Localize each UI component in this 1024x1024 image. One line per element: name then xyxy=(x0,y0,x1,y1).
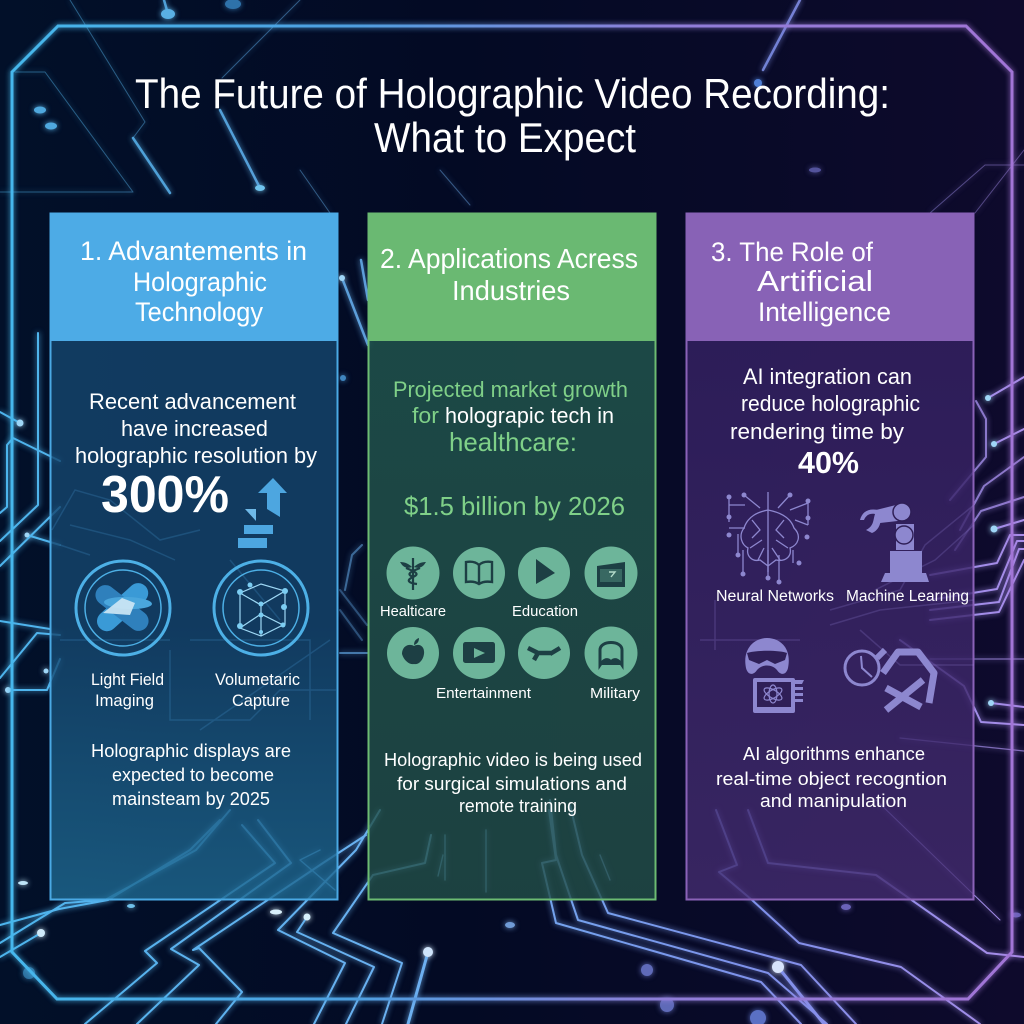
icon: clock and robotic arms xyxy=(845,650,934,710)
panel 1 header: Technology xyxy=(135,297,263,327)
panel 3 intro text: reduce holographic xyxy=(741,391,920,416)
panel 2 intro text xyxy=(393,377,628,457)
panel 2: applications xyxy=(368,213,656,900)
panel 3 intro text: AI integration can xyxy=(743,364,912,389)
panel 2 intro text: healthcare: xyxy=(449,427,577,457)
icon labels xyxy=(91,671,300,710)
panel 2 closing text: remote training xyxy=(459,795,577,816)
panel 1 header: Holographic xyxy=(133,267,267,297)
icon: upward arrow with steps xyxy=(238,478,287,548)
icon labels: Light Field xyxy=(91,671,164,689)
panel 3 closing text: real-time object recogntion xyxy=(716,768,947,789)
panel 1 closing text: Holographic displays are xyxy=(91,740,291,761)
panel 2 closing text: Holographic video is being used xyxy=(384,749,642,770)
icon: drone xyxy=(518,627,570,679)
title: The Future of Holographic Video Recording: xyxy=(135,70,890,117)
panel 2 closing text xyxy=(384,749,642,816)
icon labels: ai: Neural Networks xyxy=(716,588,834,605)
panel 3 body xyxy=(686,214,974,900)
title: What to Expect xyxy=(374,114,636,161)
panel 3 closing text: AI algorithms enhance xyxy=(743,743,925,764)
icon labels: industries: Education xyxy=(512,604,578,620)
panel 3 closing text: and manipulation xyxy=(760,790,907,811)
icon: neural network brain xyxy=(726,492,810,584)
icon: clapperboard xyxy=(584,546,638,600)
icon labels: ai: Machine Learning xyxy=(846,588,969,605)
panel 3 header: 3. The Role of xyxy=(711,237,873,267)
icon labels: industries: Military xyxy=(590,686,641,702)
icon: play xyxy=(518,547,570,599)
icon: robot arm xyxy=(860,503,929,582)
stat: 300%: 300% xyxy=(101,466,229,524)
icon: volumetric capture xyxy=(214,561,308,655)
panel 3 closing text xyxy=(716,743,947,811)
icon labels: industries: Entertainment xyxy=(436,686,531,702)
icon: video screen xyxy=(453,627,505,679)
icon labels: industries xyxy=(380,604,641,702)
panel 1 intro text: holographic resolution by xyxy=(75,443,317,468)
panel 2 header: Industries xyxy=(452,275,570,306)
panel 2 header xyxy=(368,213,656,341)
icon: helmet xyxy=(584,626,638,680)
panel 1 header xyxy=(50,213,338,341)
panel 2 intro text: holograpic tech in xyxy=(445,403,614,428)
panel 3 header: Artificial xyxy=(757,266,873,298)
panel 3 faint circuit detail xyxy=(700,505,974,665)
title xyxy=(135,70,890,161)
stat: 40%: 40% xyxy=(798,445,859,480)
panel 1 closing text xyxy=(91,740,291,809)
icon: light field imaging xyxy=(76,561,170,655)
icon: open book xyxy=(453,547,505,599)
panel 1 closing text: expected to become xyxy=(112,764,274,785)
panel 3 intro text xyxy=(730,364,920,444)
panel 1: advancements xyxy=(50,213,338,900)
panel 3: artificial intelligence xyxy=(686,213,974,900)
panel 3 header: Intelligence xyxy=(758,297,891,327)
icon labels: ai xyxy=(716,588,969,605)
panel 1 intro text: Recent advancement xyxy=(89,389,296,414)
panel 2 header: 2. Applications Acress xyxy=(380,243,638,274)
panel 3 intro text: rendering time by xyxy=(730,419,904,444)
panel 2 body xyxy=(368,214,656,900)
stat: market value: $1.5 billion by 2026 xyxy=(404,491,625,521)
panel 1 header: 1. Advantements in xyxy=(80,236,307,266)
panel 1 intro text xyxy=(75,389,317,468)
panel 3 header xyxy=(686,213,974,341)
icon grid: industries xyxy=(380,546,641,702)
icon: caduceus xyxy=(386,546,440,600)
icon: apple xyxy=(387,627,439,679)
panel 1 faint circuit detail xyxy=(52,490,336,730)
panel 2 closing text: for surgical simulations and xyxy=(397,773,627,794)
icon labels: Capture xyxy=(232,692,290,710)
panel 1 body xyxy=(50,214,338,900)
icon labels: Volumetaric xyxy=(215,671,300,689)
panel 2 intro text: Projected market growth xyxy=(393,377,628,402)
panel 2 intro text: for xyxy=(412,403,439,428)
panel 1 closing text: mainsteam by 2025 xyxy=(112,788,270,809)
icon labels: industries: Healticare xyxy=(380,604,446,620)
panel 1 intro text: have increased xyxy=(121,416,268,441)
icon labels: Imaging xyxy=(95,692,154,710)
icon: headset and laptop xyxy=(745,638,804,713)
